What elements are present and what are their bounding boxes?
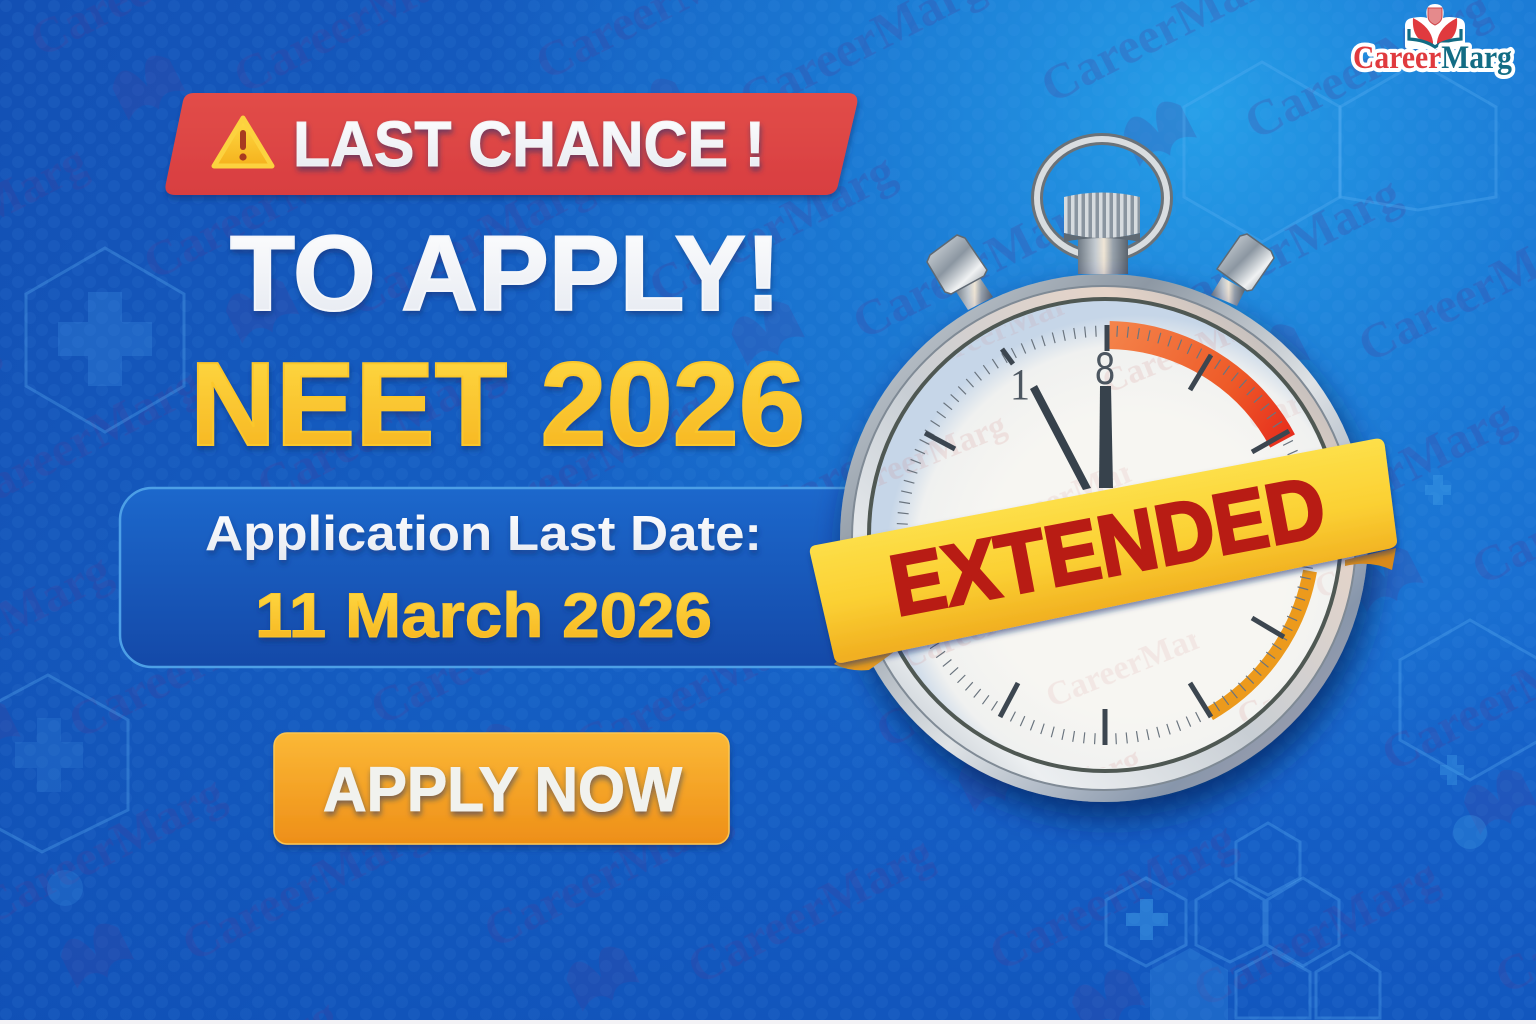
heading: NEET 2026: NEET 2026	[190, 338, 805, 471]
stopwatch	[810, 139, 1397, 802]
ribbon left tail	[834, 640, 905, 670]
hour ticks	[925, 325, 1289, 745]
orange zone arc	[1210, 571, 1310, 714]
dial numerals: 1	[1010, 360, 1030, 409]
banner text: LAST CHANCE !	[293, 108, 765, 180]
stopwatch crown	[1064, 192, 1140, 274]
label: application last date: Application Last Date:	[205, 507, 762, 561]
panel: application last date	[120, 488, 900, 667]
logo: CareerMarg	[1353, 4, 1512, 76]
logo wordmark: CareerMarg	[1353, 40, 1512, 76]
ribbon right tail	[1345, 548, 1396, 570]
minor ticks	[902, 331, 1310, 739]
dial numerals	[1010, 343, 1115, 409]
date: 11 March 2026: 11 March 2026	[255, 581, 712, 651]
clock hands	[1030, 385, 1113, 490]
stopwatch face	[871, 301, 1339, 769]
stopwatch ring	[1037, 139, 1167, 257]
yellow ribbon: extended	[810, 439, 1397, 670]
logo wordmark outline: CareerMarg	[1353, 40, 1512, 76]
ribbon label: EXTENDED	[883, 459, 1333, 635]
icon: warning triangle	[214, 118, 272, 166]
heading: to apply: TO APPLY!	[230, 213, 781, 333]
stopwatch case	[840, 274, 1368, 802]
banner: last chance	[165, 93, 857, 195]
button: apply now: APPLY NOW	[323, 755, 683, 825]
red zone arc	[1110, 335, 1283, 441]
button: apply now	[274, 733, 729, 844]
right pusher	[1211, 234, 1274, 306]
icon: open book with crest	[1405, 4, 1465, 49]
left pusher	[927, 235, 993, 310]
dial numerals: 8	[1095, 343, 1115, 394]
ribbon band	[810, 439, 1397, 663]
watermark on face	[872, 302, 1338, 768]
